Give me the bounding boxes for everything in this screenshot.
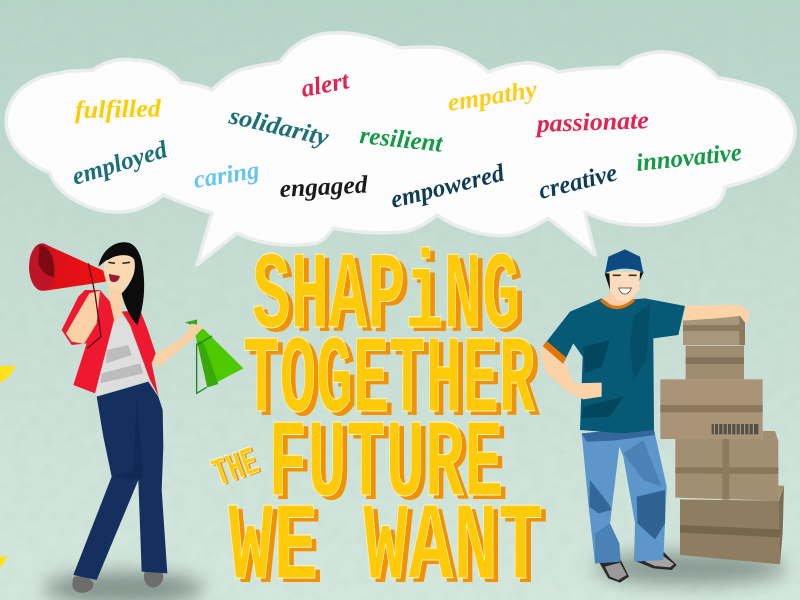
cap [605, 249, 643, 273]
T-shirt [543, 298, 685, 433]
jacket [62, 290, 158, 396]
neck [108, 283, 125, 325]
word: creative: creative [536, 159, 620, 205]
right arm [683, 305, 750, 325]
title [207, 236, 548, 600]
stack of boxes [660, 313, 784, 564]
title line: TOGETHER [243, 320, 540, 449]
T-shirt [96, 317, 149, 396]
second box [686, 346, 744, 379]
word: solidarity: solidarity [226, 102, 332, 152]
word: resilient: resilient [358, 122, 445, 158]
word: passionate: passionate [534, 107, 649, 138]
bottom box [680, 486, 784, 564]
ground shadow [593, 552, 787, 585]
neck [602, 290, 635, 308]
face [103, 255, 135, 290]
title line: TOGETHER: TOGETHER [243, 320, 535, 445]
word: fulfilled: fulfilled [75, 95, 162, 124]
word: alert: alert [299, 67, 352, 103]
red megaphone [29, 243, 106, 348]
word: empowered: empowered [388, 159, 507, 214]
eyes [613, 273, 637, 278]
title line: FUTURE [268, 404, 508, 533]
top box [683, 313, 745, 345]
word: engaged: engaged [279, 171, 369, 203]
title line: SHAPING: SHAPiNG [257, 240, 525, 365]
jeans [582, 427, 667, 563]
title line: SHAPING: SHAPiNG [252, 236, 520, 361]
word: empathy: empathy [446, 76, 540, 117]
word: innovative: innovative [635, 139, 743, 177]
barcode [712, 424, 758, 434]
title line: WE WANT [228, 487, 548, 600]
title line: TOGETHER: TOGETHER [248, 324, 540, 449]
sleeve cuff [543, 341, 566, 364]
mouth [109, 274, 120, 282]
collar [601, 300, 634, 307]
man leaning on boxes [540, 249, 787, 585]
green megaphone [185, 319, 243, 393]
title small word: THE: THE [209, 441, 267, 499]
word: employed: employed [69, 136, 171, 191]
hair [98, 242, 144, 325]
speech bubble cloud [6, 33, 795, 265]
title line: FUTURE: FUTURE [273, 408, 508, 533]
right arm [152, 323, 204, 367]
left arm [540, 343, 602, 399]
shoes [599, 552, 677, 583]
third box [660, 379, 763, 439]
title line: SHAPING [252, 236, 525, 365]
face [609, 272, 640, 302]
word: caring: caring [192, 157, 261, 194]
fourth box [675, 431, 778, 501]
hair [605, 272, 644, 290]
title small word: THE [207, 440, 267, 499]
shoes [72, 571, 163, 593]
ground shadow [43, 572, 203, 600]
trousers [73, 382, 167, 580]
title line: FUTURE: FUTURE [268, 404, 503, 529]
eyes [108, 262, 130, 263]
smile [619, 288, 631, 294]
green megaphone hand [183, 323, 204, 340]
woman with megaphones [29, 242, 243, 600]
title small word: THE: THE [207, 441, 264, 498]
icon: yellow fragments at left edge [0, 366, 16, 568]
left arm [66, 291, 100, 344]
